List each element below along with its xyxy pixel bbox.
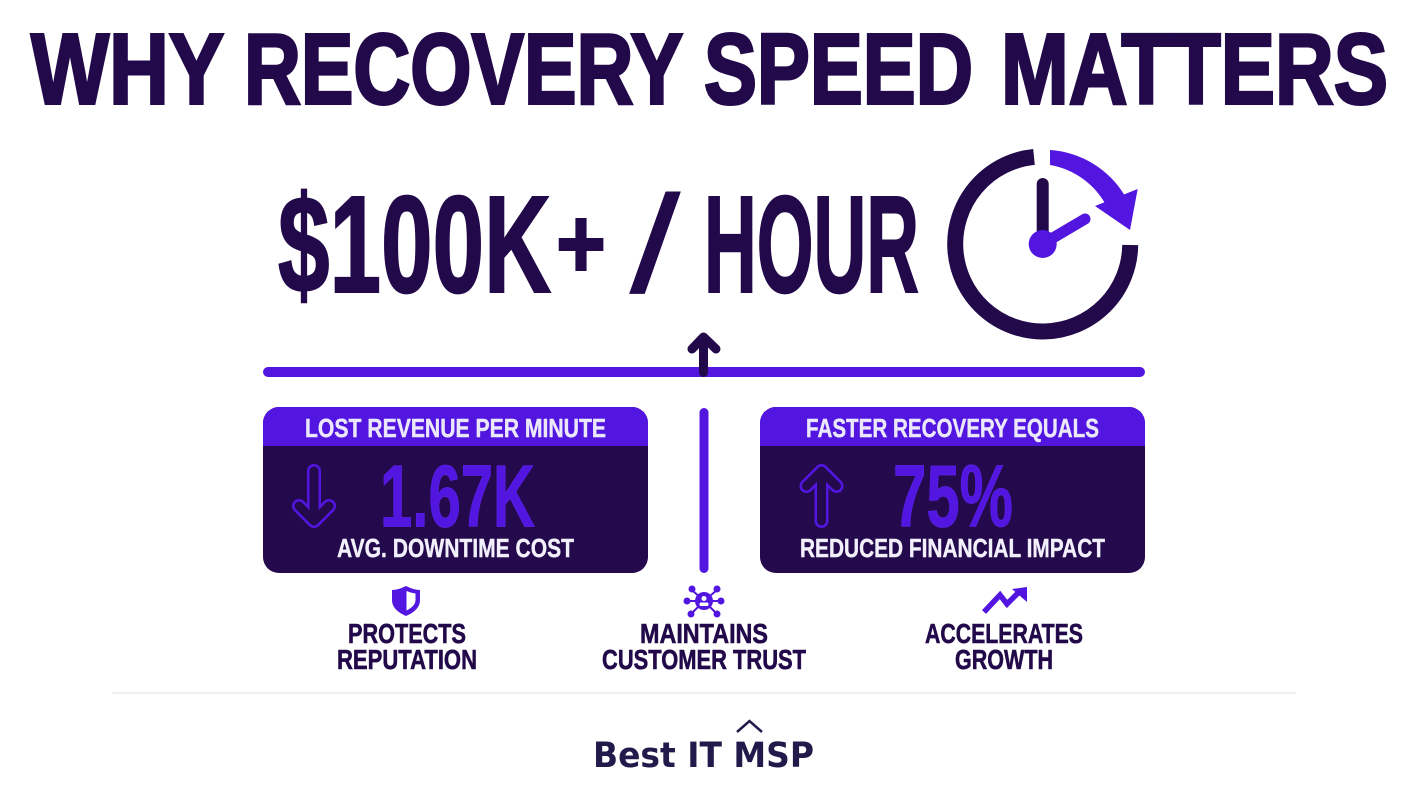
panel: lost revenue per minute: [263, 407, 648, 573]
icon: logo chevron: [737, 721, 762, 732]
logo: [593, 721, 814, 776]
label: MAINTAINS: [640, 618, 768, 649]
icon: shield: [392, 586, 420, 616]
headline stat: HOUR: [704, 168, 919, 322]
icon: network with person: [684, 586, 724, 618]
benefit: protects reputation: REPUTATION: [337, 644, 477, 675]
big number: 1.67K: [380, 446, 535, 546]
horizontal divider bar: [263, 367, 1145, 377]
benefit: accelerates growth: [925, 587, 1083, 675]
label: PROTECTS: [348, 618, 466, 649]
icon: down arrow: [299, 471, 329, 521]
panel heading: FASTER RECOVERY EQUALS: [806, 413, 1099, 443]
caption: REDUCED FINANCIAL IMPACT: [800, 533, 1105, 563]
headline stat: [278, 168, 919, 322]
title: WHY: [31, 14, 224, 126]
headline stat: $100K: [278, 168, 551, 322]
vertical connector bar: [700, 408, 708, 573]
icon: up arrow: [806, 471, 836, 521]
title: [31, 14, 1388, 126]
caption: AVG. DOWNTIME COST: [337, 533, 574, 563]
icon: trend arrow: [984, 587, 1027, 612]
panel: faster recovery equals: [760, 407, 1145, 573]
benefit: maintains customer trust: CUSTOMER TRUST: [602, 644, 806, 675]
title: SPEED: [704, 14, 973, 126]
big number: 75%: [893, 446, 1013, 546]
logo text: Best IT MSP: [593, 736, 814, 776]
benefit: accelerates growth: GROWTH: [955, 644, 1053, 675]
title: RECOVERY: [244, 14, 683, 126]
icon: up arrow on bar: [692, 337, 716, 372]
benefit: maintains customer trust: [602, 586, 806, 675]
benefit: protects reputation: [337, 586, 477, 675]
icon: clock with recovery arrow: [955, 150, 1138, 331]
headline stat: /: [630, 168, 681, 322]
label: ACCELERATES: [925, 618, 1083, 649]
panel heading: LOST REVENUE PER MINUTE: [305, 413, 606, 443]
headline stat: +: [556, 188, 606, 300]
